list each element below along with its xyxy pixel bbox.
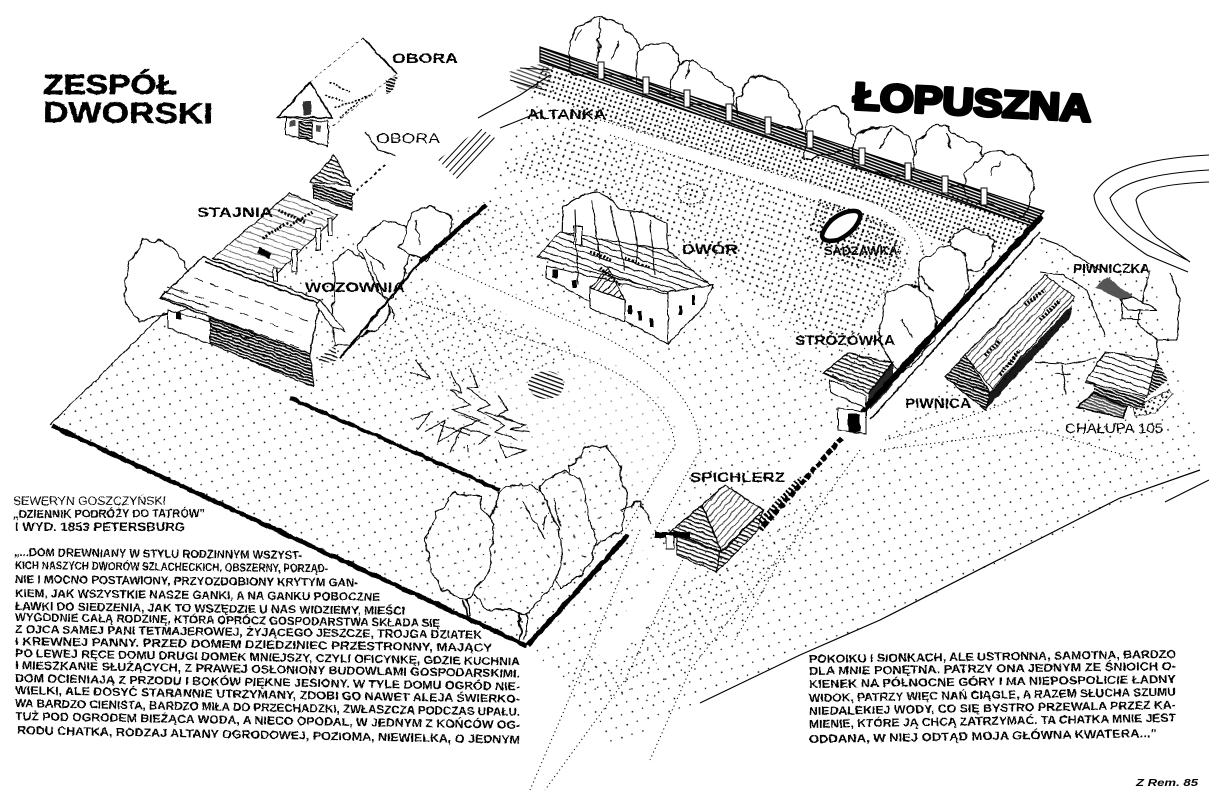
building labels: SPICHLERZ [690, 469, 786, 485]
trees along the back fence [570, 16, 1034, 216]
cellar: piwniczka [1095, 277, 1157, 320]
quotation: left column: Z OJCA SAMEJ PANI TETMAJEROWEJ, ŻYJĄCEGO JESZCZE, TROJGA DZIATEK [15, 623, 483, 642]
carriage house: wozownia [158, 257, 345, 387]
building labels: OBORA [376, 130, 441, 146]
building labels: WOZOWNIA [305, 279, 405, 295]
garden and courtyard paths [432, 128, 1040, 650]
building labels: PIWNICA [905, 395, 971, 411]
building labels: STRÓŻÓWKA [795, 331, 895, 348]
building labels: DWÓR [682, 240, 738, 257]
river bend [1094, 155, 1209, 272]
back fence [540, 47, 1044, 226]
trees around the cellar and cottage [1035, 238, 1180, 394]
building labels: CHAŁUPA 105 [1065, 420, 1163, 436]
quotation: right column [809, 649, 1176, 746]
quotation: left column: I MIESZKANIE SŁUŻĄCYCH, Z PRAWEJ OSŁONIONY BUDOWLAMI GOSPODARSKIMI. [15, 659, 520, 680]
building labels: STAJNIA [197, 204, 273, 220]
quotation: left column [14, 547, 520, 747]
valley edge line [700, 470, 1209, 703]
trees behind the manor [562, 192, 668, 258]
trees on the left side [125, 207, 453, 345]
quotation: left column: I KREWNEJ PANNY. PRZED DOMEM DZIEDZINIEC PRZESTRONNY, MAJĄCY [15, 636, 492, 655]
quotation: left column: WA BARDZO CIENISTA, BARDZO MIŁA DO PRZECHADZKI, ZWŁASZCZA PODCZAS UPAŁU. [15, 698, 520, 719]
quotation: left column: KICH NASZYCH DWORÓW SZLACHECKICH, OBSZERNY, PORZĄD- [15, 559, 328, 575]
quotation: right column: KIENEK NA PÓŁNOCNE GÓRY I MA NIEPOSPOLICIE ŁADNY [809, 673, 1176, 691]
left hedge and front border [50, 205, 527, 646]
dotted path edges [410, 120, 1140, 790]
trees along the right fence [880, 230, 993, 375]
quotation: left column: ŁAWKI DO SIEDZENIA, JAK TO WSZĘDZIE U NAS WIDZIEMY, MIEŚCI [15, 600, 405, 618]
barn: obora [278, 38, 398, 146]
quotation: right column: NIEDALEKIEJ WODY, CO SIĘ BYSTRO PRZEWALA PRZEZ KA- [809, 700, 1176, 718]
building labels: ALTANKA [527, 106, 606, 122]
cellar: piwnica [945, 275, 1075, 410]
stable: stajnia [213, 193, 338, 281]
cottage: chałupa 105 [1077, 352, 1172, 418]
trees in the front yard [425, 445, 650, 645]
quotation: left column: NIE I MOCNO POSTAWIONY, PRZYOZDOBIONY KRYTYM GAN- [15, 574, 358, 590]
right fence [528, 216, 1042, 645]
quotation: right column: WIDOK, PATRZY WIĘC NAŃ CIĄGLE, A RAZEM SŁUCHA SZUMU [809, 686, 1176, 705]
source citation: I WYD. 1853 PETERSBURG [15, 522, 185, 534]
manor house: dwór [537, 192, 713, 344]
source citation [13, 495, 205, 534]
pond [822, 211, 860, 241]
stippled ground outside the fence [535, 240, 1205, 750]
quotation: right column: MIENIE, KTÓRE JĄ CHCĄ ZATRZYMAĆ. TA CHATKA MNIE JEST [809, 712, 1176, 731]
stippled lawns inside the manor [50, 60, 1040, 645]
quotation: left column: „...DOM DREWNIANY W STYLU RODZINNYM WSZYST- [14, 547, 302, 562]
quotation: right column: ODDANA, W NIEJ ODTĄD MOJA GŁÓWNA KWATERA...” [809, 727, 1157, 746]
barn: second obora [310, 132, 395, 210]
quotation: left column: DOM OCIENIAJĄ Z PRZODU I BOKÓW PIĘKNE JESIONY. W TYLE DOMU OGRÓD NIE- [15, 672, 520, 693]
quotation: left column: WIELKI, ALE DOSYĆ STARANNIE UTRZYMANY, ZDOBI GO NAWET ALEJA ŚWIERKO- [15, 684, 520, 706]
source citation: SEWERYN GOSZCZYŃSKI [13, 495, 166, 508]
quotation: left column: TUŻ POD OGRODEM BIEŻĄCA WODA, A NIECO OPODAL, W JEDNYM Z KOŃCÓW OG- [15, 710, 520, 732]
quotation: left column: WYGODNIE CAŁĄ RODZINĘ, KTÓRA OPRÓCZ GOSPODARSTWA SKŁADA SIĘ [15, 611, 440, 630]
building labels: PIWNICZKA [1073, 262, 1150, 276]
source citation: „DZIENNIK PODRÓŻY DO TATRÓW” [13, 507, 205, 521]
quotation: right column: DLA MNIE PONĘTNA. PATRZY ONA JEDNYM ZE ŚNIOICH O- [809, 660, 1176, 678]
granary: spichlerz [666, 480, 800, 572]
round flower bed [678, 184, 704, 204]
spruce trees [410, 360, 530, 463]
building labels: SADZAWKA [824, 244, 898, 258]
quotation: left column: RODU CHATKA, RODZAJ ALTANY OGRODOWEJ, POZIOMA, NIEWIELKA, O JEDNYM [17, 725, 520, 747]
steps and arbour [438, 62, 552, 180]
quotation: left column: KIEM, JAK WSZYSTKIE NASZE GANKI, A NA GANKU POBOCZNE [15, 588, 380, 604]
place name: ŁOPUSZNA [853, 76, 1092, 130]
heading: DWORSKI [43, 97, 213, 130]
gatehouse: stróżówka [823, 353, 893, 434]
heading: ZESPÓŁ [43, 69, 177, 100]
quotation: right column: POKOIKU I SIONKACH, ALE USTRONNA, SAMOTNA, BARDZO [809, 649, 1176, 666]
building labels [197, 50, 1163, 485]
signature: Z Rem. 85 [1135, 778, 1199, 789]
heading [43, 69, 213, 130]
quotation: left column: PO LEWEJ RĘCE DOMU DRUGI DOMEK MNIEJSZY, CZYLI OFICYNKĘ, GDZIE KUCHNIA [15, 648, 520, 668]
building labels: OBORA [392, 50, 458, 66]
